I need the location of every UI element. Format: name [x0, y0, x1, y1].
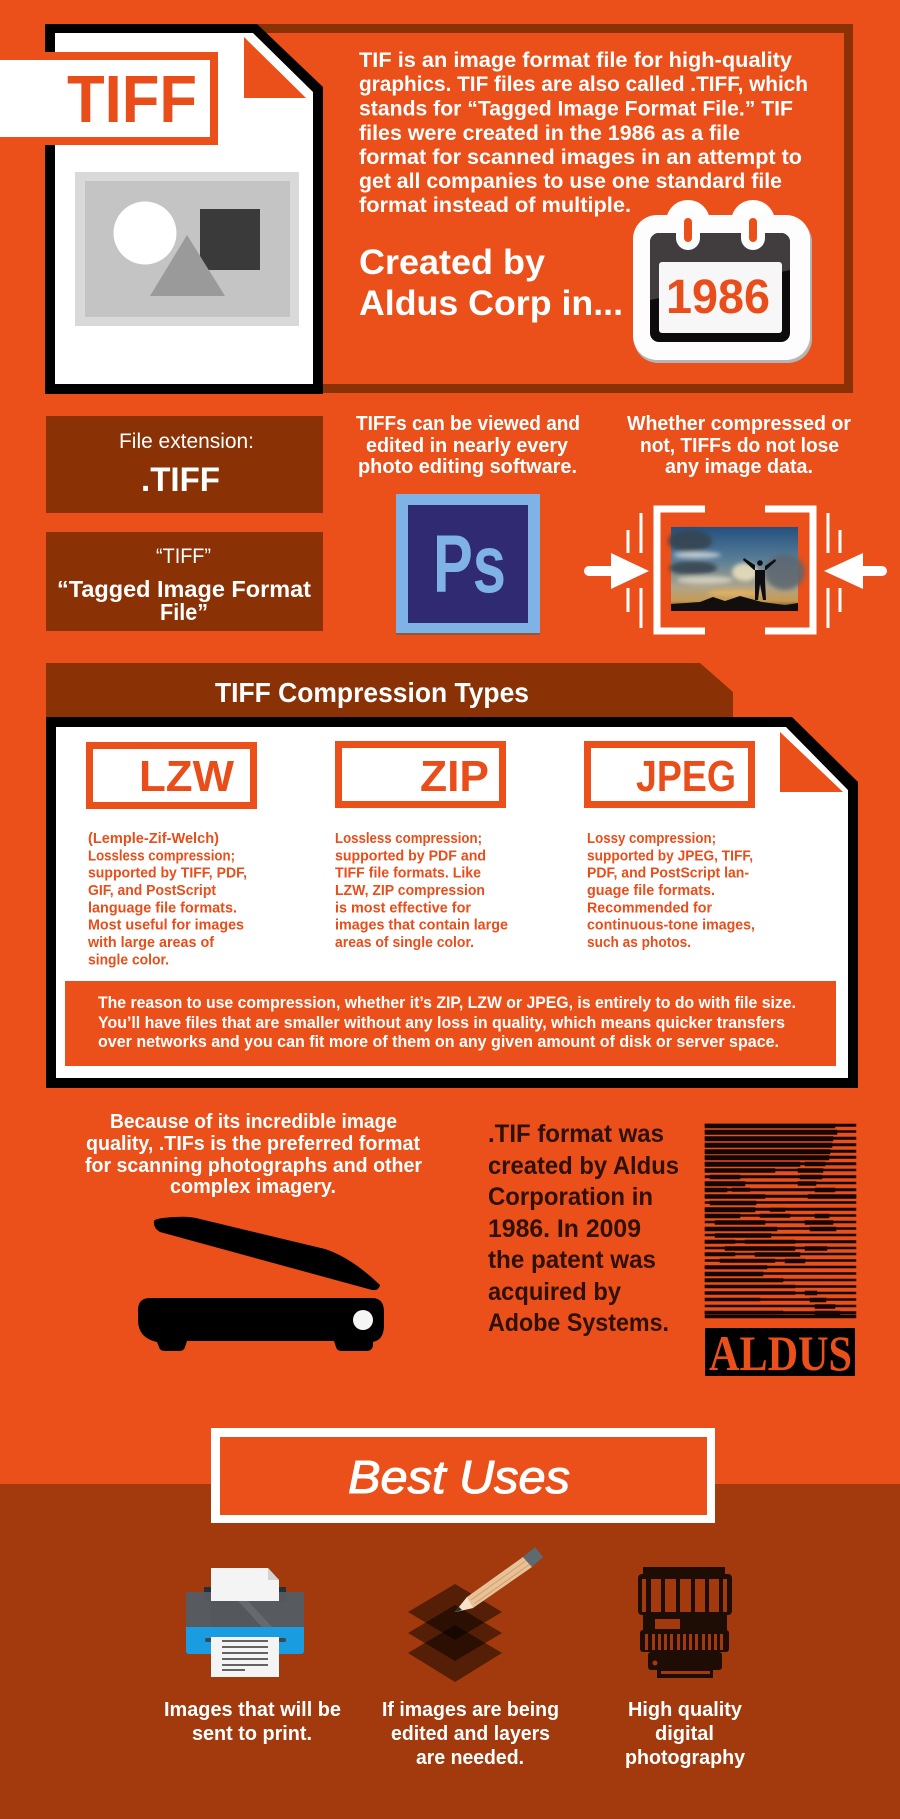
text: LZW description: with large areas of — [87, 934, 215, 951]
callout: why compress: over networks and you can fit more of them on any given amount of disk or server space. — [98, 1032, 779, 1051]
heading: TIFF Compression Types — [46, 663, 733, 725]
layers — [408, 1584, 502, 1682]
arrows — [584, 553, 649, 589]
text: JPEG description: Lossy compression; — [587, 830, 716, 847]
text: photography use: High quality — [628, 1699, 743, 1721]
text: ZIP description: TIFF file formats. Like — [335, 865, 481, 882]
TIFF label — [0, 52, 218, 145]
text: LZW description: single color. — [88, 951, 169, 968]
text: photography use: photography — [625, 1747, 746, 1769]
label: LZW: LZW — [139, 752, 234, 801]
text: scanning: for scanning photographs and other — [85, 1155, 422, 1177]
label: LZW — [90, 746, 254, 806]
image placeholder — [75, 172, 299, 326]
text: ZIP description: areas of single color. — [335, 934, 474, 951]
text: LZW description: Lossless compression; — [88, 847, 235, 864]
heading: TIFF Compression Types: TIFF Compression Types — [215, 677, 529, 708]
text: layers use: If images are being — [382, 1699, 559, 1721]
text: LZW description: language file formats. — [88, 899, 237, 916]
text: Aldus history: acquired by — [488, 1278, 621, 1306]
panel: file extension: File extension: — [119, 430, 254, 453]
text: print use: Images that will be — [164, 1699, 341, 1721]
text: ZIP description: images that contain large — [335, 917, 508, 934]
callout: why compress — [65, 981, 836, 1066]
created by heading: Aldus Corp in... — [359, 284, 623, 323]
text: viewed and edited: TIFFs can be viewed and — [356, 413, 580, 435]
panel: file extension — [46, 416, 323, 513]
text: viewed and edited: photo editing software. — [358, 456, 577, 478]
label: ZIP — [338, 744, 502, 804]
label: JPEG: JPEG — [636, 752, 736, 801]
text: print use: sent to print. — [192, 1723, 312, 1745]
icon: TIFF file document — [0, 24, 323, 394]
text: ZIP description: Lossless compression; — [335, 830, 482, 847]
text: Aldus history: .TIF format was — [488, 1120, 664, 1148]
text: JPEG description: supported by JPEG, TIFF, — [587, 847, 753, 864]
icon: calendar 1986 — [633, 200, 812, 363]
panel: file extension: .TIFF — [141, 461, 220, 499]
intro paragraph: stands for “Tagged Image Format File.” TIF — [359, 98, 793, 120]
intro paragraph: format for scanned images in an attempt to — [359, 146, 802, 169]
label: ZIP: ZIP — [420, 752, 489, 801]
TIFF label: TIFF — [67, 62, 197, 137]
intro paragraph: files were created in the 1986 as a file — [359, 122, 740, 145]
text: ZIP description: supported by PDF and — [335, 847, 486, 864]
text: layers use: are needed. — [416, 1747, 524, 1769]
icon: layers with pencil — [408, 1547, 543, 1682]
text: ZIP description — [335, 830, 508, 951]
intro paragraph: get all companies to use one standard file — [359, 170, 782, 193]
intro paragraph: TIF is an image format file for high-quality — [359, 49, 792, 72]
callout: why compress: You’ll have files that are smaller without any loss in quality, which means quicker transfers — [98, 1013, 785, 1032]
text: scanning: complex imagery. — [170, 1176, 336, 1198]
text: layers use: edited and layers — [391, 1723, 550, 1745]
text: JPEG description: guage file formats. — [587, 882, 715, 899]
text: JPEG description: Recommended for — [587, 899, 712, 916]
text: scanning: Because of its incredible image — [110, 1111, 397, 1133]
callout: why compress: The reason to use compression, whether it’s ZIP, LZW or JPEG, is entirely to do with file size. — [98, 993, 796, 1012]
text: Aldus history — [488, 1120, 679, 1337]
icon: Aldus logo — [705, 1124, 856, 1381]
text: scanning: quality, .TIFs is the preferred format — [86, 1133, 420, 1155]
created by heading: Created by — [359, 243, 546, 282]
text: no data loss — [627, 413, 851, 478]
text: photography use: digital — [655, 1723, 714, 1745]
portrait stripes — [705, 1124, 856, 1318]
text: JPEG description — [587, 830, 755, 951]
icon: camera lens — [638, 1567, 732, 1678]
ALDUS wordmark: ALDUS — [709, 1325, 852, 1381]
icon: printer — [186, 1568, 304, 1677]
text: LZW description: GIF, and PostScript — [88, 882, 216, 899]
brackets — [657, 509, 813, 631]
panel: TIFF meaning: “TIFF” — [156, 545, 211, 568]
photo — [668, 527, 805, 611]
label: JPEG — [588, 744, 752, 804]
text: LZW description: (Lemple-Zif-Welch) — [88, 830, 219, 847]
panel: TIFF meaning: File” — [160, 599, 208, 625]
text: viewed and edited — [356, 413, 580, 478]
panel: TIFF meaning: “Tagged Image Format — [57, 576, 311, 602]
text: Aldus history: Adobe Systems. — [488, 1309, 669, 1337]
text: JPEG description: PDF, and PostScript lan- — [587, 865, 749, 882]
panel: TIFF intro — [255, 24, 853, 393]
text: Aldus history: the patent was — [488, 1246, 656, 1274]
icon: calendar 1986: 1986 — [666, 271, 770, 324]
text: LZW description — [87, 830, 247, 968]
text: LZW description: supported by TIFF, PDF, — [88, 865, 247, 882]
icon: scanner — [138, 1217, 384, 1351]
text: Aldus history: Corporation in — [488, 1183, 653, 1211]
text: ZIP description: is most effective for — [335, 899, 471, 916]
text: ZIP description: LZW, ZIP compression — [335, 882, 485, 899]
text: LZW description: Most useful for images — [88, 917, 244, 934]
intro paragraph: format instead of multiple. — [359, 194, 631, 217]
heading: Best Uses: Best Uses — [348, 1451, 570, 1503]
text: no data loss: not, TIFFs do not lose — [640, 435, 839, 457]
text: JPEG description: continuous-tone images, — [587, 917, 755, 934]
text: photography use — [625, 1699, 746, 1769]
text: JPEG description: such as photos. — [587, 934, 691, 951]
text: scanning — [85, 1111, 422, 1198]
intro paragraph — [359, 49, 808, 217]
created by heading — [359, 243, 623, 323]
text: Aldus history: created by Aldus — [488, 1152, 679, 1180]
text: viewed and edited: edited in nearly every — [366, 435, 569, 457]
pencil — [455, 1547, 543, 1612]
text: Aldus history: 1986. In 2009 — [488, 1215, 641, 1243]
icon: Photoshop — [396, 494, 540, 635]
icon: Photoshop: Ps — [433, 519, 506, 610]
compression lines — [628, 513, 840, 628]
panel: TIFF meaning — [46, 532, 323, 631]
icon: compression with photo — [584, 509, 887, 631]
intro paragraph: graphics. TIF files are also called .TIFF, which — [359, 73, 808, 96]
text: no data loss: Whether compressed or — [627, 413, 851, 435]
text: layers use — [382, 1699, 559, 1769]
text: no data loss: any image data. — [665, 456, 813, 478]
heading: Best Uses — [211, 1428, 715, 1523]
text: print use — [164, 1699, 341, 1745]
panel: compression types document — [46, 717, 858, 1088]
